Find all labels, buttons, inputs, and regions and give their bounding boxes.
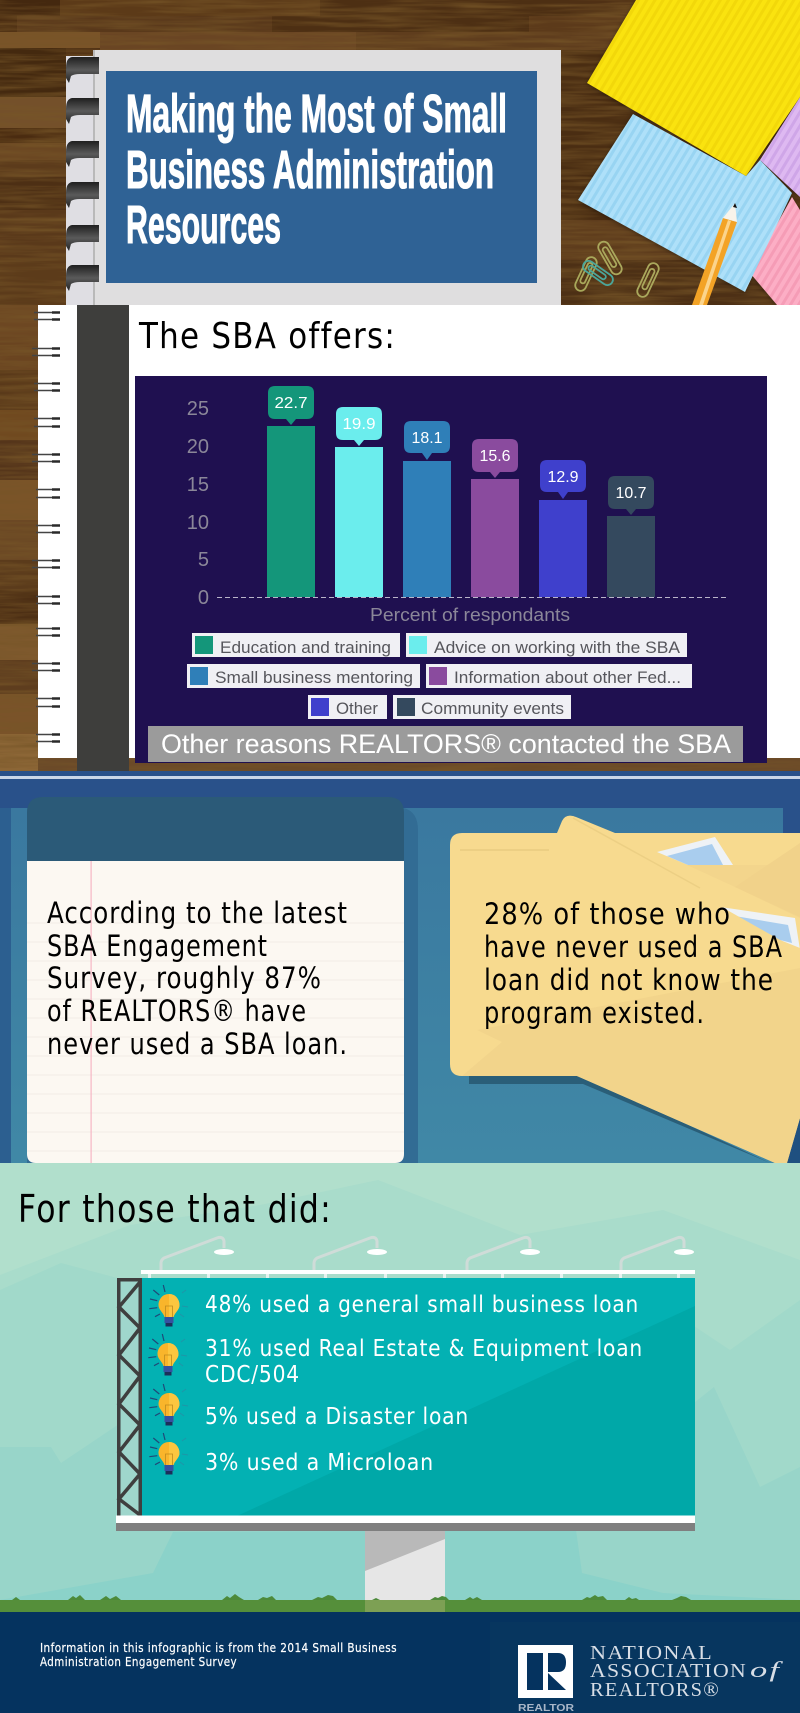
y axis labels: [187, 398, 209, 609]
axis baseline: [217, 596, 727, 598]
loan usage list: [205, 1292, 643, 1476]
icon: light bulb 1: [149, 1285, 188, 1326]
value callouts: 22.7: [274, 395, 308, 412]
icon: paper clips: [573, 240, 661, 299]
text: survey statement: SBA Engagement: [47, 929, 268, 963]
bars: [267, 426, 655, 597]
logo: association name: REALTORS®: [590, 1679, 720, 1701]
legend: Information about other Fed...: [454, 668, 681, 687]
y axis labels: 20: [187, 436, 209, 458]
billboard top rail: [141, 1270, 695, 1278]
loan usage list: 48% used a general small business loan: [205, 1292, 639, 1318]
panel: survey section background: [0, 771, 800, 1163]
chart caption banner: Other reasons REALTORS® contacted the SBA: [161, 729, 731, 759]
footer source text: Administration Engagement Survey: [40, 1654, 237, 1669]
sticky papers top right: [578, 0, 800, 305]
panel: folder: [450, 816, 800, 1163]
value callouts: 15.6: [480, 448, 511, 465]
heading: For those that did: For those that did:: [18, 1187, 332, 1231]
bar chart panel: [135, 376, 767, 763]
billboard: [116, 1237, 695, 1612]
title panel: [106, 71, 537, 283]
text: survey statement: never used a SBA loan.: [47, 1027, 348, 1061]
title: Making the Most of Small: [126, 84, 507, 144]
value callouts: [268, 386, 654, 515]
axis title: Percent of respondants: [370, 605, 570, 625]
text: survey statement: of REALTORS® have: [47, 994, 307, 1028]
y axis labels: 5: [198, 549, 209, 571]
background: wood desk: [0, 0, 800, 772]
legend: Other: [336, 699, 378, 718]
logo: association name: of: [750, 1657, 783, 1682]
text: awareness statement: [484, 897, 783, 1030]
title: Business Administration: [126, 140, 494, 200]
icon: pencil: [692, 203, 737, 305]
legend: Community events: [421, 699, 564, 718]
value callouts: 18.1: [412, 430, 443, 447]
loan usage list: 31% used Real Estate & Equipment loan: [205, 1336, 643, 1362]
legend: Small business mentoring: [215, 668, 413, 687]
y axis labels: 25: [187, 398, 209, 420]
billboard post: [365, 1531, 445, 1612]
text: awareness statement: 28% of those who: [484, 897, 731, 931]
legend: Education and training: [220, 638, 391, 657]
logo: association name: NATIONAL: [590, 1642, 713, 1664]
panel: SBA offers notebook sheet: [32, 305, 800, 772]
loan usage list: CDC/504: [205, 1362, 300, 1388]
y axis labels: 0: [198, 587, 209, 609]
icon: light bulb 3: [149, 1384, 188, 1426]
footer source text: Information in this infographic is from the 2014 Small Business: [40, 1640, 397, 1655]
logo: REALTOR mark: [518, 1645, 574, 1713]
spiral binding marks: [32, 312, 60, 742]
loan usage list: 3% used a Microloan: [205, 1450, 434, 1476]
text: awareness statement: program existed.: [484, 996, 705, 1030]
notebook rings: [66, 57, 99, 291]
notebook page cover: [66, 50, 561, 305]
text: survey statement: Survey, roughly 87%: [47, 961, 322, 995]
panel: billboard section background: [0, 1163, 800, 1612]
y axis labels: 10: [187, 512, 209, 534]
logo: association name: [590, 1642, 783, 1701]
icon: light bulb 4: [149, 1433, 188, 1474]
legend: [187, 633, 692, 719]
title: Resources: [126, 195, 281, 255]
legend: Advice on working with the SBA: [434, 638, 681, 657]
loan usage list: 5% used a Disaster loan: [205, 1404, 469, 1430]
value callouts: 12.9: [548, 469, 579, 486]
title: [126, 84, 507, 255]
icon: light bulb 2: [148, 1334, 187, 1376]
billboard truss: [117, 1278, 142, 1516]
folder back: [557, 816, 800, 1000]
grass strip: [0, 1594, 800, 1612]
text: survey statement: According to the latest: [47, 896, 348, 930]
text: survey statement: [47, 896, 348, 1061]
value callouts: 10.7: [616, 485, 647, 502]
footer: [0, 1612, 800, 1713]
heading: The SBA offers: The SBA offers:: [138, 316, 396, 357]
billboard lamps: [161, 1237, 694, 1270]
folder front: [450, 816, 800, 1163]
panel: notepad: [27, 797, 418, 1163]
value callouts: 19.9: [342, 416, 376, 433]
footer source text: [40, 1640, 397, 1669]
y axis labels: 15: [187, 474, 209, 496]
billboard base: [116, 1516, 695, 1531]
paper in folder: [657, 837, 733, 865]
logo: association name: ASSOCIATION: [590, 1660, 747, 1682]
billboard screen: [142, 1278, 695, 1516]
